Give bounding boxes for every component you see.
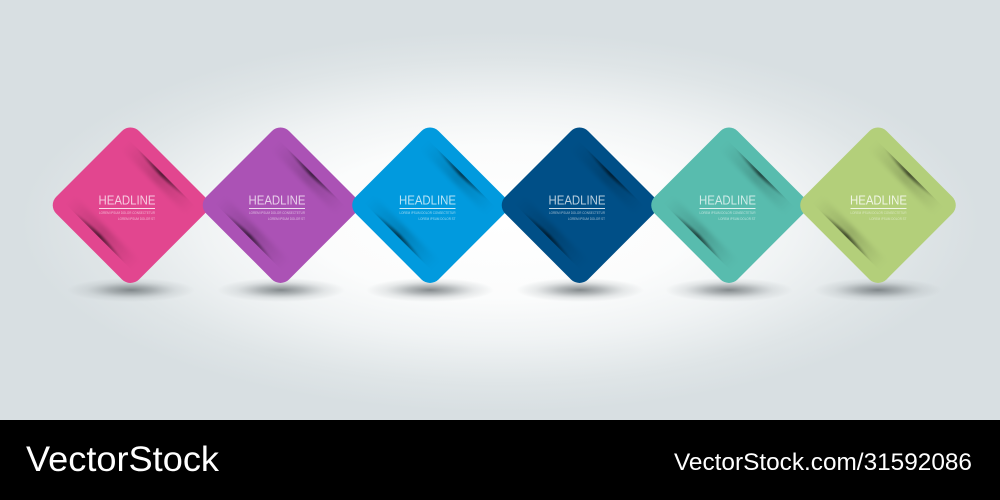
panel: pink diamond: LOREM IPSUM DOLOR ST: [118, 217, 155, 221]
footer logo text: VectorStock: [26, 440, 220, 479]
heading: teal: HEADLINE: [699, 192, 756, 207]
panel: green diamond: LOREM IPSUM DOLOR CONSECTETUR: [850, 211, 907, 215]
panel: green diamond: [795, 122, 961, 288]
panel: blue diamond: LOREM IPSUM DOLOR CONSECTETUR: [400, 211, 456, 215]
panel: teal diamond: LOREM IPSUM DOLOR CONSECTETUR: [700, 211, 756, 215]
panel: navy diamond: LOREM IPSUM DOLOR CONSECTETUR: [549, 211, 605, 215]
panel: green diamond: LOREM IPSUM DOLOR ST: [870, 217, 906, 221]
heading: purple: HEADLINE: [248, 192, 306, 207]
panel: teal diamond: LOREM IPSUM DOLOR ST: [718, 217, 756, 221]
panel: purple diamond: LOREM IPSUM DOLOR ST: [268, 217, 305, 221]
panel: pink diamond: [48, 122, 213, 288]
heading: navy: HEADLINE: [548, 192, 606, 207]
footer band: [0, 420, 1000, 500]
ground shadows: [67, 278, 942, 302]
heading: blue: HEADLINE: [399, 192, 456, 207]
panel: blue diamond: LOREM IPSUM DOLOR ST: [418, 217, 456, 221]
panel: blue diamond: [347, 122, 513, 288]
panel: teal diamond: [646, 122, 812, 288]
panel: pink diamond: LOREM IPSUM DOLOR CONSECTETUR: [99, 211, 155, 215]
panel: purple diamond: LOREM IPSUM DOLOR CONSECTETUR: [249, 211, 305, 215]
panel: purple diamond: [198, 122, 363, 288]
footer image id: VectorStock.com/31592086: [674, 449, 972, 476]
heading: green: HEADLINE: [850, 192, 907, 207]
panel: navy diamond: [497, 122, 662, 288]
heading: pink: HEADLINE: [98, 192, 156, 207]
panel: navy diamond: LOREM IPSUM DOLOR ST: [568, 217, 605, 221]
